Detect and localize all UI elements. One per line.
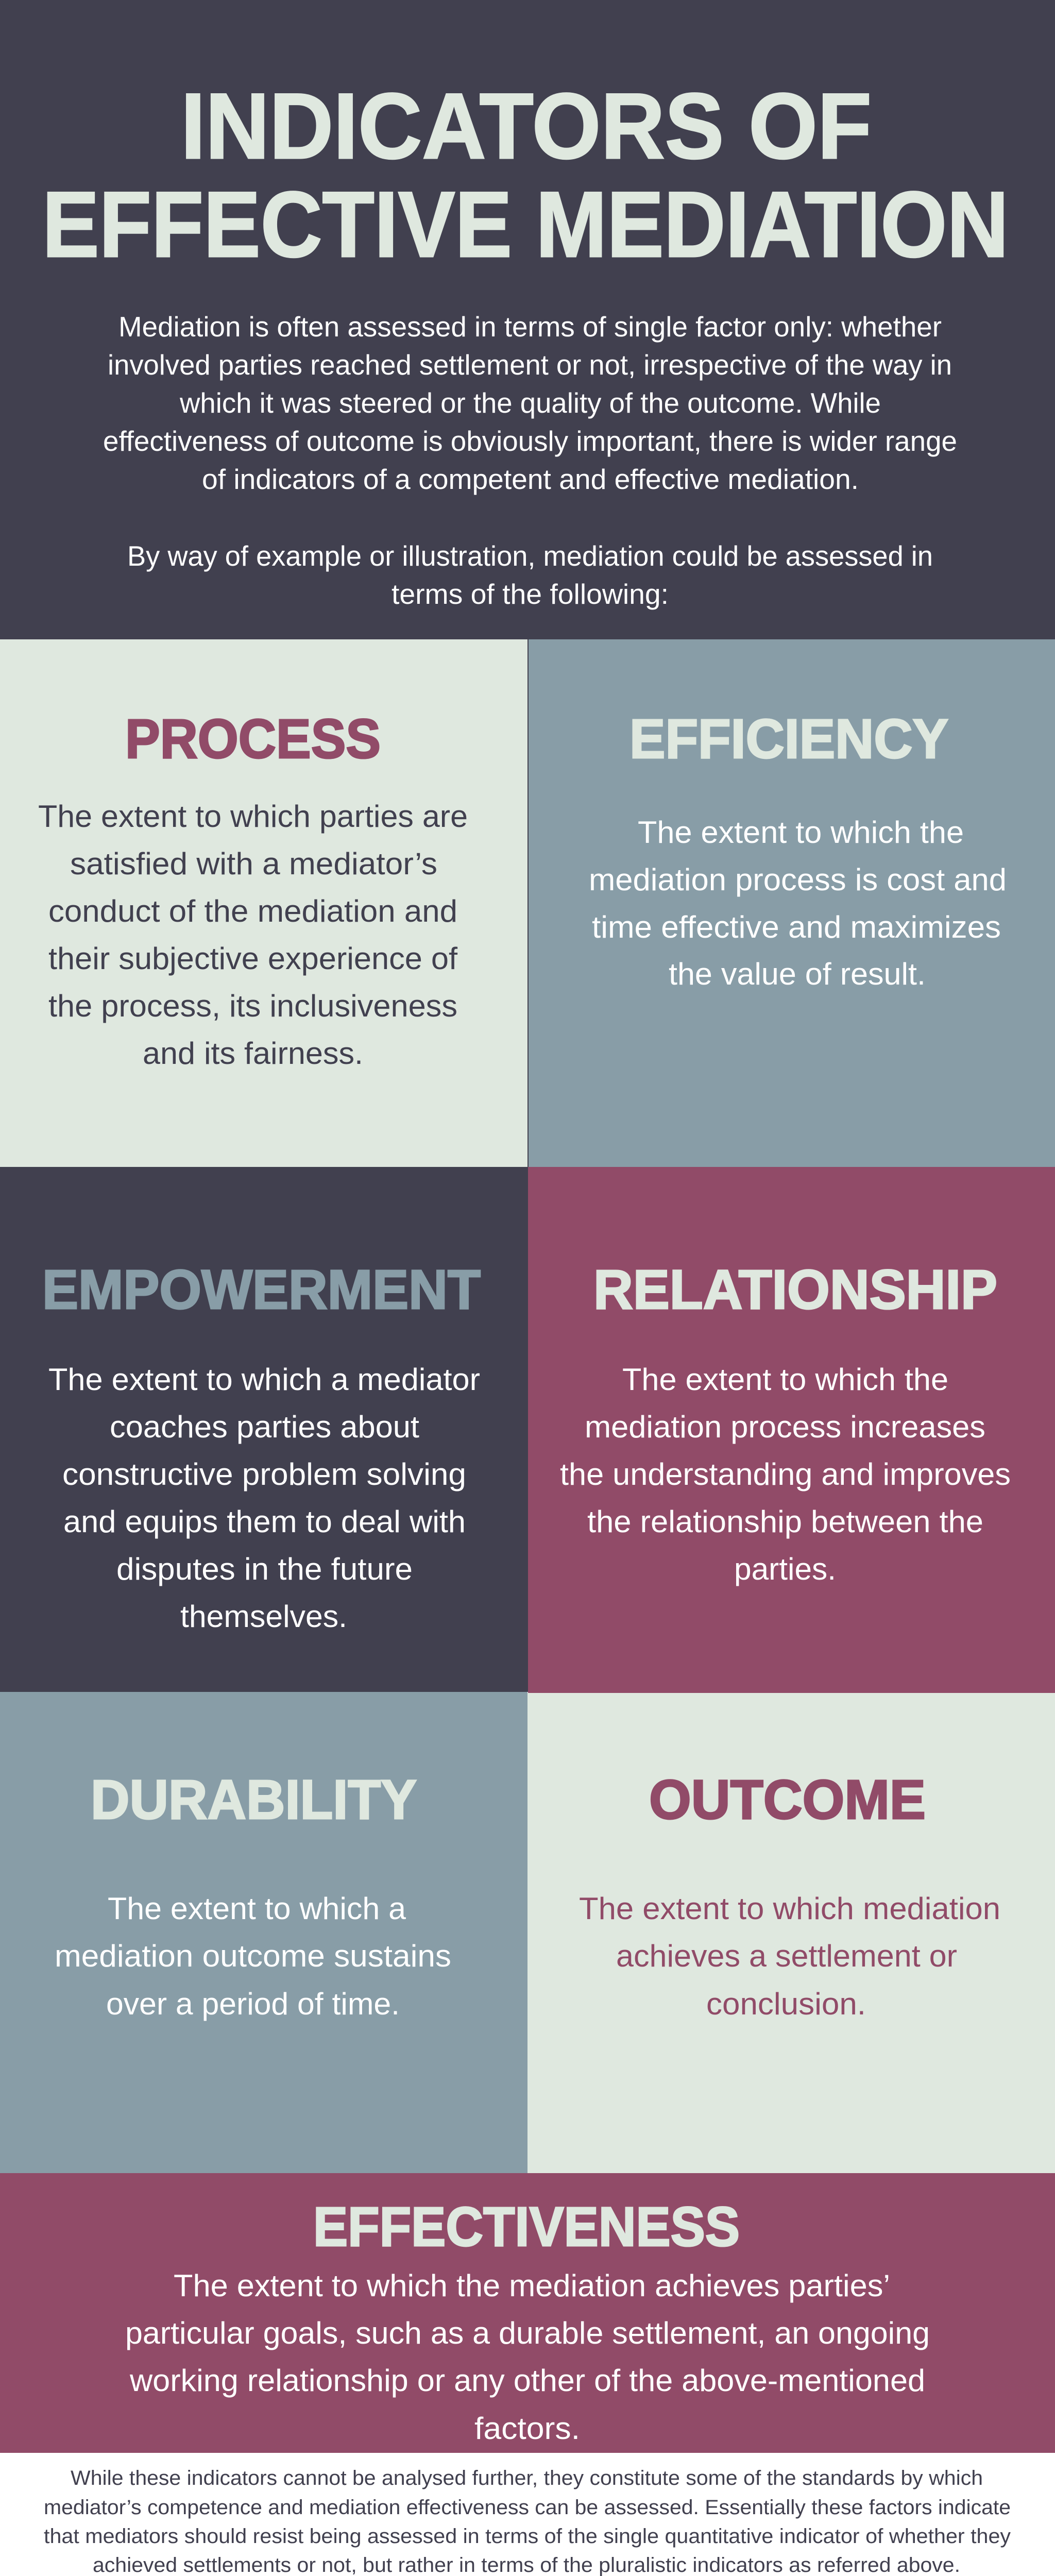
text: closing paragraph: achieved settlements or not, but rather in terms of the pluralistic indicators as referred above.: [93, 2554, 960, 2576]
text: empowerment description: coaches parties about: [110, 1410, 419, 1444]
header panel: [0, 0, 1055, 639]
text: relationship description: [560, 1362, 1011, 1586]
text: effectiveness description: working relationship or any other of the above-mentioned: [129, 2363, 925, 2398]
intro paragraph: effectiveness of outcome is obviously important, there is wider range: [103, 425, 957, 457]
text: effectiveness description: particular goals, such as a durable settlement, an ongoing: [125, 2316, 930, 2350]
text: empowerment description: constructive problem solving: [62, 1457, 466, 1492]
panel: durability: [0, 1692, 528, 2173]
text: closing paragraph: that mediators should resist being assessed in terms of the single quantitative indicator of whether they: [44, 2525, 1011, 2548]
text: effectiveness description: The extent to which the mediation achieves parties’: [174, 2268, 890, 2303]
text: relationship description: the relationship between the: [587, 1504, 983, 1539]
intro lead-in: [127, 540, 933, 610]
text: closing paragraph: While these indicators cannot be analysed further, they constitute some of the standards by which: [71, 2467, 983, 2489]
text: empowerment description: [48, 1362, 480, 1634]
heading: outcome: OUTCOME: [649, 1768, 926, 1831]
panel: outcome: [528, 1693, 1055, 2173]
text: empowerment description: disputes in the future: [116, 1552, 413, 1586]
heading: efficiency: EFFICIENCY: [629, 707, 948, 770]
text: empowerment description: The extent to which a mediator: [48, 1362, 480, 1397]
intro paragraph: Mediation is often assessed in terms of single factor only: whether: [118, 311, 942, 343]
text: outcome description: [579, 1891, 1000, 2021]
title: INDICATORS OF: [181, 74, 872, 178]
text: closing paragraph: [44, 2467, 1011, 2576]
heading: process: PROCESS: [125, 707, 381, 770]
heading: relationship: RELATIONSHIP: [593, 1258, 997, 1320]
text: relationship description: parties.: [734, 1552, 836, 1586]
panel: efficiency: [528, 639, 1055, 1167]
text: closing paragraph: mediator’s competence and mediation effectiveness can be assessed. Essentially these factors indicate: [44, 2496, 1011, 2519]
text: empowerment description: themselves.: [180, 1599, 347, 1634]
text: durability description: over a period of time.: [106, 1987, 400, 2021]
text: process description: and its fairness.: [143, 1036, 363, 1071]
panel: relationship: [528, 1167, 1055, 1693]
intro lead-in: By way of example or illustration, mediation could be assessed in: [127, 540, 933, 572]
heading: empowerment: EMPOWERMENT: [42, 1258, 481, 1320]
text: relationship description: mediation process increases: [585, 1410, 985, 1444]
heading: effectiveness: EFFECTIVENESS: [313, 2195, 740, 2258]
text: outcome description: achieves a settlement or: [616, 1939, 957, 1973]
text: durability description: mediation outcome sustains: [55, 1939, 451, 1973]
intro paragraph: [103, 311, 957, 495]
text: efficiency description: the value of result.: [669, 957, 926, 991]
text: relationship description: The extent to which the: [622, 1362, 948, 1397]
text: efficiency description: mediation process is cost and: [589, 862, 1007, 897]
text: outcome description: conclusion.: [706, 1987, 866, 2021]
panel: effectiveness: [0, 2173, 1055, 2453]
text: efficiency description: The extent to which the: [638, 815, 964, 850]
title: [42, 74, 1009, 277]
text: efficiency description: time effective and maximizes: [592, 910, 1001, 944]
panel: empowerment: [0, 1167, 528, 1692]
text: process description: [38, 799, 468, 1071]
text: durability description: The extent to which a: [108, 1891, 406, 1926]
text: effectiveness description: factors.: [474, 2411, 580, 2446]
text: outcome description: The extent to which mediation: [579, 1891, 1000, 1926]
text: effectiveness description: [125, 2268, 930, 2446]
text: relationship description: the understanding and improves: [560, 1457, 1011, 1492]
text: durability description: [55, 1891, 451, 2021]
text: process description: The extent to which parties are: [38, 799, 468, 834]
closing section: [0, 2453, 1055, 2576]
intro paragraph: involved parties reached settlement or not, irrespective of the way in: [108, 349, 952, 381]
text: process description: their subjective experience of: [48, 941, 457, 976]
intro paragraph: which it was steered or the quality of the outcome. While: [179, 387, 881, 419]
text: empowerment description: and equips them to deal with: [63, 1504, 466, 1539]
text: process description: satisfied with a mediator’s: [70, 846, 437, 881]
panel: process: [0, 639, 528, 1167]
text: process description: conduct of the mediation and: [48, 894, 457, 928]
heading: durability: DURABILITY: [91, 1768, 417, 1831]
text: efficiency description: [589, 815, 1007, 991]
intro lead-in: terms of the following:: [392, 578, 669, 610]
intro paragraph: of indicators of a competent and effective mediation.: [202, 463, 859, 495]
text: process description: the process, its inclusiveness: [48, 989, 457, 1023]
